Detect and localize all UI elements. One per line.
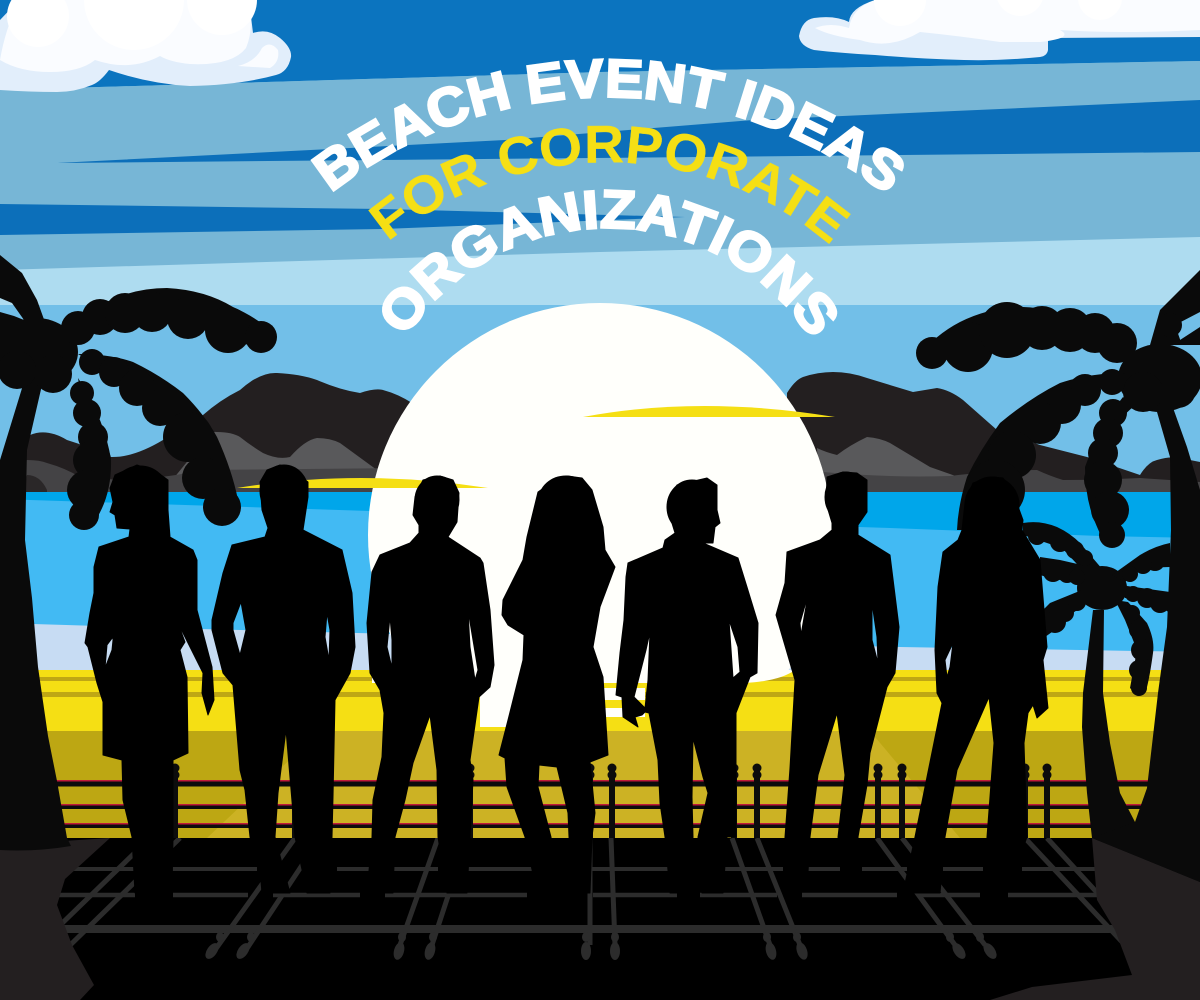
mountains left <box>0 373 412 495</box>
left palm crown <box>0 318 78 393</box>
floor <box>0 838 1200 1000</box>
rock right <box>990 838 1200 1000</box>
sky with streaks <box>0 0 1200 500</box>
sun reflection on sand <box>372 670 795 727</box>
silhouette: woman 7 <box>903 477 1048 893</box>
cloud left <box>0 0 291 92</box>
right palm upper right frond <box>1150 270 1200 345</box>
right palm lower frond <box>1084 397 1135 548</box>
left palm right frond <box>78 349 241 526</box>
fence rails <box>50 780 1150 828</box>
silhouette: woman 4 <box>499 476 615 893</box>
left palm lower frond <box>67 378 111 530</box>
title line 2: FOR CORPORATE <box>368 126 851 244</box>
left palm top frond <box>61 288 277 353</box>
fence posts <box>170 764 1052 838</box>
yellow cloud left <box>237 478 488 488</box>
mountains right <box>787 372 1200 495</box>
silhouette: man 6 <box>776 472 899 890</box>
sand <box>0 670 1200 838</box>
silhouette: man 5 <box>616 478 758 893</box>
palm tree right <box>916 270 1200 882</box>
silhouette: woman 1 <box>85 465 214 893</box>
title <box>310 58 904 334</box>
right palm trunk <box>1092 405 1200 882</box>
silhouette: man 2 <box>212 465 355 893</box>
sun <box>368 303 832 767</box>
title line 1: BEACH EVENT IDEAS <box>310 58 904 192</box>
title line 3: ORGANIZATIONS <box>382 189 838 334</box>
right palm top frond <box>916 302 1137 372</box>
right palm left frond <box>957 369 1125 530</box>
left palm trunk <box>0 385 71 850</box>
palm tree left <box>0 255 277 850</box>
silhouette: man 3 <box>367 476 494 893</box>
right palm crown <box>1118 344 1200 412</box>
yellow cloud over sun <box>583 406 835 417</box>
sea <box>0 492 1200 672</box>
small palm tree <box>1023 522 1170 850</box>
railing shadows on the floor <box>50 838 1145 961</box>
left palm upper left frond <box>0 255 46 345</box>
cloud right <box>799 0 1200 60</box>
rock left <box>0 838 110 1000</box>
